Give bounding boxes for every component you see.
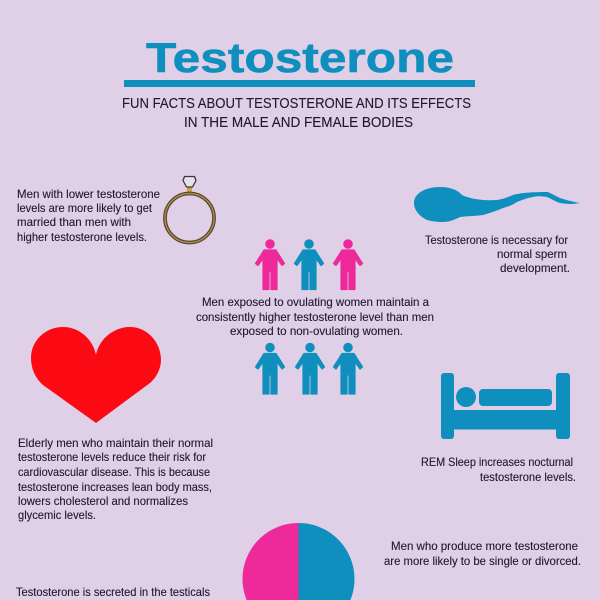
text: sleep fact: testosterone levels. bbox=[480, 470, 576, 484]
title: Testosterone bbox=[146, 34, 454, 81]
text: sperm fact: Testosterone is necessary for bbox=[425, 233, 568, 247]
text: relationship fact bbox=[384, 539, 581, 568]
text: heart fact: glycemic levels. bbox=[18, 508, 96, 522]
icon: lower row of people bbox=[256, 343, 362, 394]
text: heart fact: testosterone levels reduce their risk for bbox=[18, 450, 206, 464]
text: ovulation fact bbox=[196, 295, 434, 338]
text: marriage fact: higher testosterone levels. bbox=[17, 230, 147, 244]
text: sperm fact: development. bbox=[500, 261, 570, 275]
text: sperm fact bbox=[425, 233, 570, 275]
icon: two-colour pie bbox=[243, 523, 354, 600]
text: heart fact: cardiovascular disease. This is because bbox=[18, 465, 210, 479]
icon: heart bbox=[31, 327, 161, 423]
text: relationship fact: Men who produce more testosterone bbox=[391, 539, 578, 553]
icon: upper row of people bbox=[256, 240, 362, 290]
text: sperm fact: normal sperm bbox=[497, 247, 567, 261]
subtitle bbox=[122, 95, 471, 131]
text: sleep fact bbox=[421, 455, 576, 484]
text: heart fact: Elderly men who maintain their normal bbox=[18, 436, 213, 450]
text: heart fact: testosterone increases lean body mass, bbox=[18, 480, 212, 494]
subtitle: FUN FACTS ABOUT TESTOSTERONE AND ITS EFFECTS bbox=[122, 95, 471, 112]
text: marriage fact: levels are more likely to get bbox=[17, 201, 153, 215]
icon: sperm bbox=[414, 187, 580, 222]
text: relationship fact: are more likely to be single or divorced. bbox=[384, 554, 581, 568]
subtitle: IN THE MALE AND FEMALE BODIES bbox=[184, 114, 413, 131]
text: testicals fact: Testosterone is secreted in the testicals bbox=[16, 585, 210, 599]
text: ovulation fact: Men exposed to ovulating women maintain a bbox=[202, 295, 429, 309]
text: heart fact bbox=[18, 436, 213, 522]
text: ovulation fact: consistently higher testosterone level than men bbox=[196, 310, 434, 324]
text: heart fact: lowers cholesterol and normalizes bbox=[18, 494, 188, 508]
text: marriage fact: married than men with bbox=[17, 215, 131, 229]
icon: diamond ring bbox=[165, 176, 214, 242]
text: marriage fact bbox=[17, 187, 160, 244]
text: marriage fact: Men with lower testosterone bbox=[17, 187, 160, 201]
text: sleep fact: REM Sleep increases nocturnal bbox=[421, 455, 573, 469]
icon: bed bbox=[441, 373, 570, 439]
text: ovulation fact: exposed to non-ovulating women. bbox=[230, 324, 403, 338]
title bbox=[124, 34, 475, 87]
